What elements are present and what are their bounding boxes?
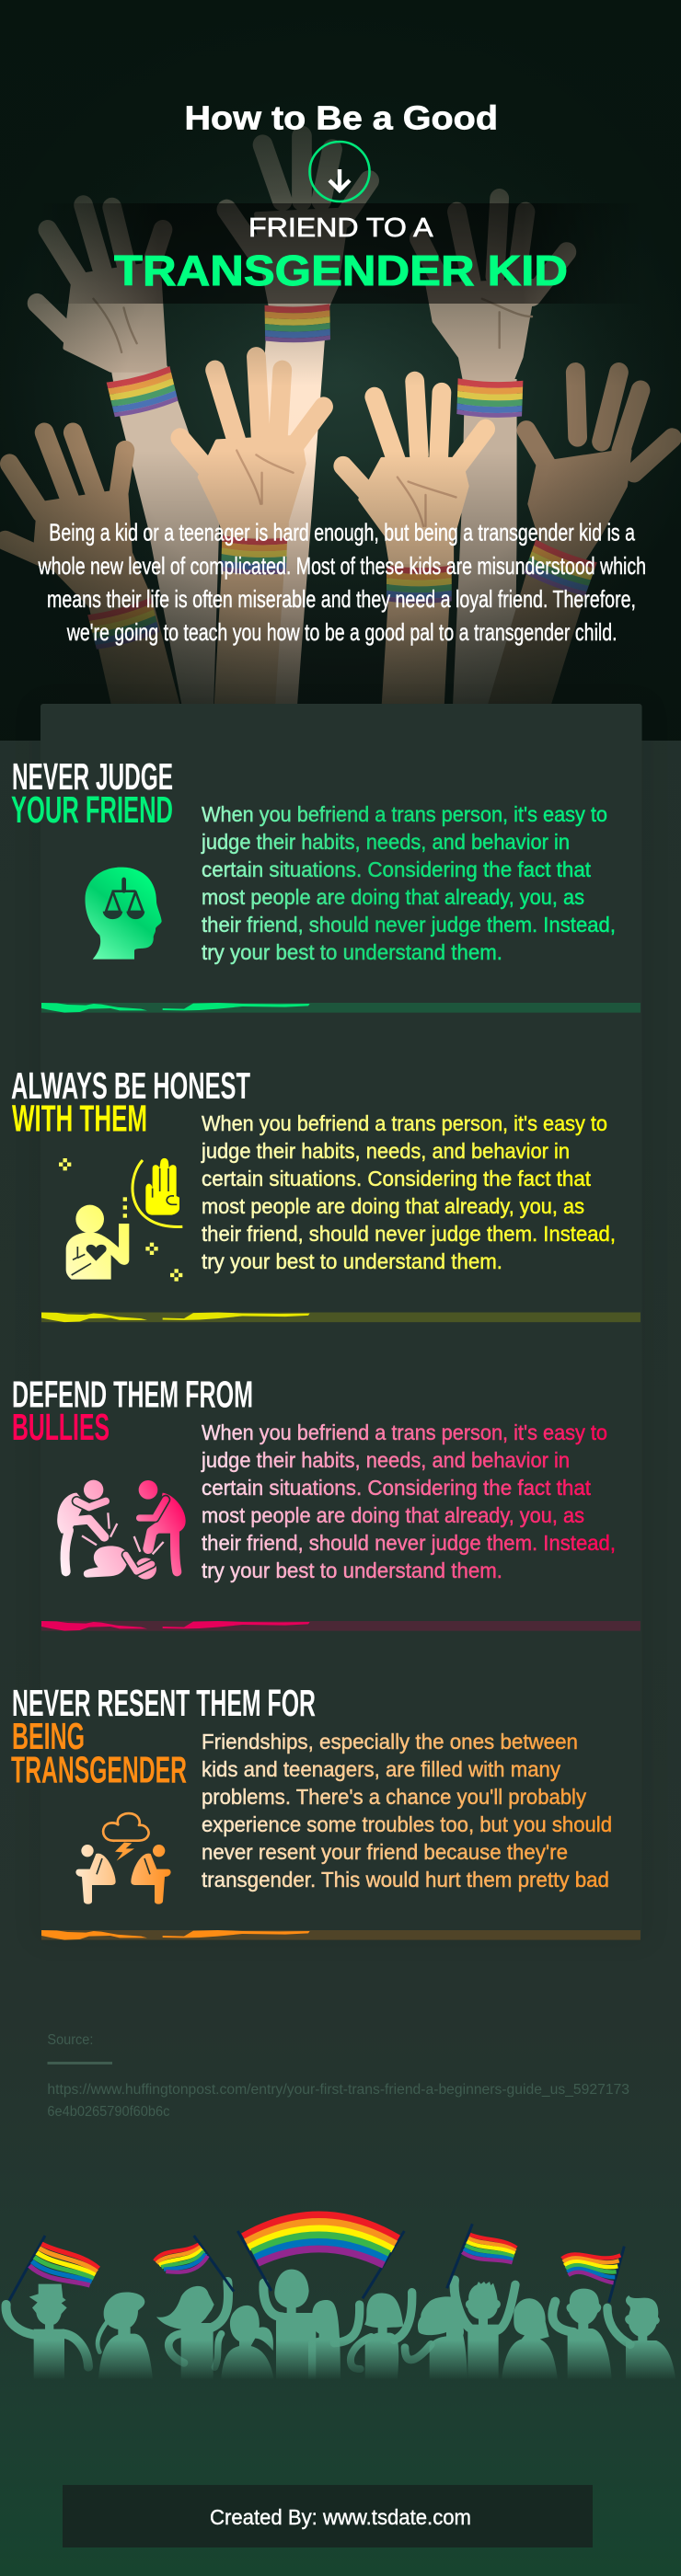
heading: ALWAYS BE HONEST: [11, 1064, 250, 1107]
body text: judge their habits, needs, and behavior in: [201, 1139, 570, 1163]
hero background: [0, 0, 681, 741]
divider: [41, 1621, 641, 1631]
body text: try your best to understand them.: [202, 1558, 502, 1582]
body text: [201, 802, 616, 964]
body text: Friendships, especially the ones between: [202, 1730, 578, 1754]
heading: NEVER JUDGE: [12, 755, 173, 798]
body text: problems. There's a chance you'll probably: [202, 1785, 586, 1809]
body text: experience some troubles too, but you should: [202, 1812, 612, 1836]
icon: person with heart and raised hand: [59, 1158, 182, 1282]
source block: [47, 2032, 629, 2120]
body text: never resent your friend because they're: [202, 1840, 568, 1864]
body text: [201, 1111, 616, 1273]
hero dimming overlays: [0, 0, 681, 741]
body text: certain situations. Considering the fact that: [202, 857, 592, 881]
heading: BEING: [12, 1715, 85, 1757]
body text: try your best to understand them.: [202, 940, 502, 964]
heading: WITH THEM: [12, 1097, 147, 1139]
heading: [12, 1373, 253, 1448]
body text: transgender. This would hurt them pretty bad: [202, 1868, 609, 1892]
source block: https://www.huffingtonpost.com/entry/your-first-trans-friend-a-beginners-guide_us_5927173: [47, 2082, 629, 2098]
title: transgender kid: TRANSGENDER KID: [114, 247, 568, 294]
rainbow arch flag: [243, 2214, 398, 2265]
icon: bullies kicking a person: [57, 1480, 186, 1580]
title: how to be a good: How to Be a Good: [184, 99, 498, 136]
heading: YOUR FRIEND: [11, 788, 173, 831]
body text: judge their habits, needs, and behavior in: [201, 1448, 570, 1472]
source block: Source:: [47, 2032, 93, 2048]
section: always be honest with them: [11, 1064, 641, 1322]
body text: When you befriend a trans person, it's easy to: [202, 802, 607, 826]
body text: certain situations. Considering the fact that: [202, 1167, 592, 1190]
body text: certain situations. Considering the fact that: [202, 1476, 592, 1500]
icon: two people under a storm cloud: [75, 1813, 171, 1904]
body text: most people are doing that already, you, as: [202, 885, 584, 909]
divider: [41, 1003, 641, 1013]
heading: [11, 1064, 250, 1139]
icon: head with scales: [85, 868, 162, 960]
source block: 6e4b0265790f60b6c: [47, 2104, 169, 2120]
crowd with rainbow flags: [6, 2214, 676, 2383]
crowd left half: [6, 2231, 340, 2383]
footer credit text: Created By: www.tsdate.com: [210, 2505, 471, 2529]
heading: [11, 1682, 316, 1790]
body text: their friend, should never judge them. Instead,: [202, 913, 616, 937]
icon: circled down arrow: [309, 142, 370, 201]
divider: [41, 1930, 641, 1940]
section: defend them from bullies: [12, 1373, 641, 1631]
flag three: [462, 2235, 516, 2262]
body text: When you befriend a trans person, it's easy to: [202, 1420, 607, 1444]
footer bar: [63, 2485, 593, 2547]
heading: NEVER RESENT THEM FOR: [12, 1682, 316, 1724]
flag one: [29, 2244, 98, 2285]
panel shadow: [35, 704, 648, 1941]
title: friend to a: FRIEND TO A: [248, 213, 433, 243]
body text: When you befriend a trans person, it's easy to: [202, 1111, 607, 1135]
body text: their friend, should never judge them. Instead,: [202, 1531, 616, 1555]
body text: [201, 1420, 616, 1582]
intro paragraph: [38, 519, 646, 646]
heading: DEFEND THEM FROM: [12, 1373, 253, 1415]
crowd right half: [334, 2224, 676, 2383]
divider: [41, 1312, 641, 1322]
heading: TRANSGENDER: [11, 1748, 187, 1790]
body text: judge their habits, needs, and behavior in: [201, 830, 570, 854]
title band: [37, 203, 644, 304]
body text: try your best to understand them.: [202, 1249, 502, 1273]
heading: [11, 755, 173, 831]
flag four: [562, 2254, 620, 2283]
section: never resent them: [11, 1682, 641, 1940]
main content panel: [40, 704, 642, 1939]
hands illustration: [6, 136, 673, 731]
section: never judge your friend: [11, 755, 641, 1013]
heading: BULLIES: [12, 1406, 110, 1448]
body text: their friend, should never judge them. Instead,: [202, 1222, 616, 1246]
body text: kids and teenagers, are filled with many: [202, 1757, 560, 1781]
body text: most people are doing that already, you, as: [202, 1194, 584, 1218]
body text: [202, 1730, 612, 1892]
body text: most people are doing that already, you, as: [202, 1503, 584, 1527]
flag two: [155, 2245, 208, 2272]
